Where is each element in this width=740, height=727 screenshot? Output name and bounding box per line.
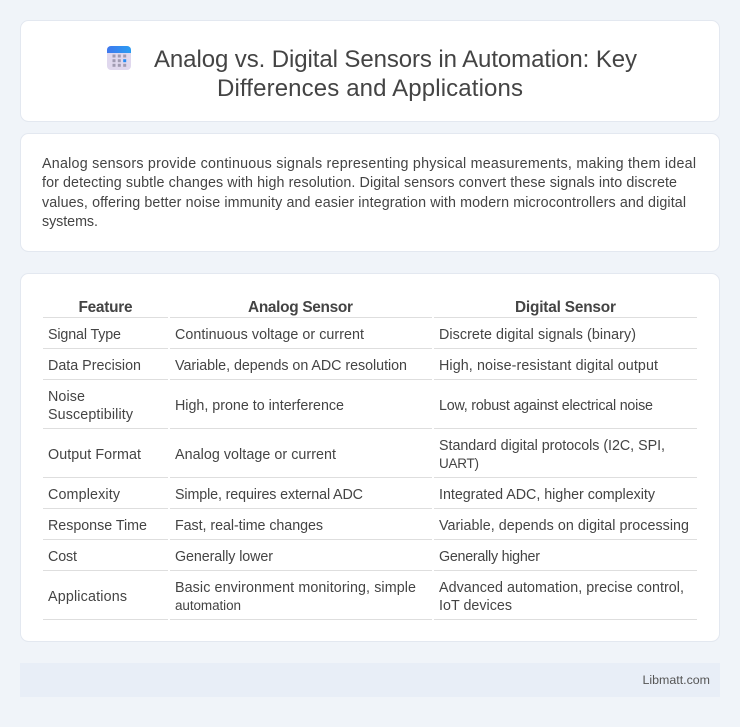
- intro paragraph: Analog sensors provide continuous signals representing physical measurements, making them ideal: [42, 156, 696, 172]
- table header row: [43, 299, 697, 318]
- footer: [20, 663, 720, 697]
- row: applications: Advanced automation, precise control,: [439, 580, 684, 596]
- row: applications: Basic environment monitoring, simple: [175, 580, 416, 596]
- row: signal type: Signal Type: [48, 327, 121, 343]
- row: output format: Analog voltage or current: [175, 447, 336, 463]
- panel: intro text: [20, 134, 720, 252]
- intro paragraph: values, offering better noise immunity and easier integration with modern microcontrollers and digital: [42, 195, 686, 211]
- row: signal type: Continuous voltage or current: [175, 327, 364, 343]
- row: applications: IoT devices: [439, 598, 512, 614]
- row: data precision: Data Precision: [48, 358, 141, 374]
- row: signal type: Discrete digital signals (binary): [439, 327, 636, 343]
- intro paragraph: systems.: [42, 214, 98, 230]
- intro paragraph: [42, 156, 696, 230]
- row: noise susceptibility: [43, 389, 697, 429]
- row: data precision: High, noise-resistant digital output: [439, 358, 658, 374]
- row: response time: Fast, real-time changes: [175, 518, 323, 534]
- row: signal type: [43, 327, 697, 349]
- panel: comparison table: [20, 274, 720, 642]
- row: complexity: Simple, requires external ADC: [175, 487, 363, 503]
- title: Differences and Applications: [217, 75, 523, 102]
- row: output format: Output Format: [48, 447, 141, 463]
- row: output format: [43, 438, 697, 478]
- intro paragraph: for detecting subtle changes with high resolution. Digital sensors convert these signals into discrete: [42, 175, 677, 191]
- row: response time: Variable, depends on digital processing: [439, 518, 689, 534]
- row: response time: [43, 518, 697, 540]
- row: noise susceptibility: High, prone to interference: [175, 398, 344, 414]
- row: complexity: Integrated ADC, higher complexity: [439, 487, 656, 503]
- row: noise susceptibility: Noise: [48, 389, 85, 405]
- table header row: Analog Sensor: [248, 299, 353, 316]
- footer: Libmatt.com: [642, 673, 710, 687]
- title: Analog vs. Digital Sensors in Automation: Key: [154, 46, 637, 73]
- row: applications: automation: [175, 598, 241, 613]
- table header row: Feature: [78, 299, 133, 316]
- row: response time: Response Time: [48, 518, 147, 534]
- row: data precision: [43, 358, 697, 380]
- row: output format: Standard digital protocols (I2C, SPI,: [439, 438, 665, 454]
- row: applications: [43, 580, 697, 620]
- row: complexity: Complexity: [48, 487, 121, 503]
- table header row: Digital Sensor: [515, 299, 616, 316]
- row: noise susceptibility: Low, robust against electrical noise: [439, 398, 653, 414]
- icon: calendar: [107, 46, 131, 70]
- title: [154, 46, 637, 102]
- row: cost: Cost: [48, 549, 77, 565]
- row: noise susceptibility: Susceptibility: [48, 407, 134, 423]
- panel: header: [20, 20, 720, 122]
- row: cost: [43, 549, 697, 571]
- row: data precision: Variable, depends on ADC resolution: [175, 358, 407, 374]
- row: output format: UART): [439, 456, 479, 471]
- row: cost: Generally higher: [439, 549, 540, 565]
- row: complexity: [43, 487, 697, 509]
- row: cost: Generally lower: [175, 549, 273, 565]
- row: applications: Applications: [48, 589, 127, 605]
